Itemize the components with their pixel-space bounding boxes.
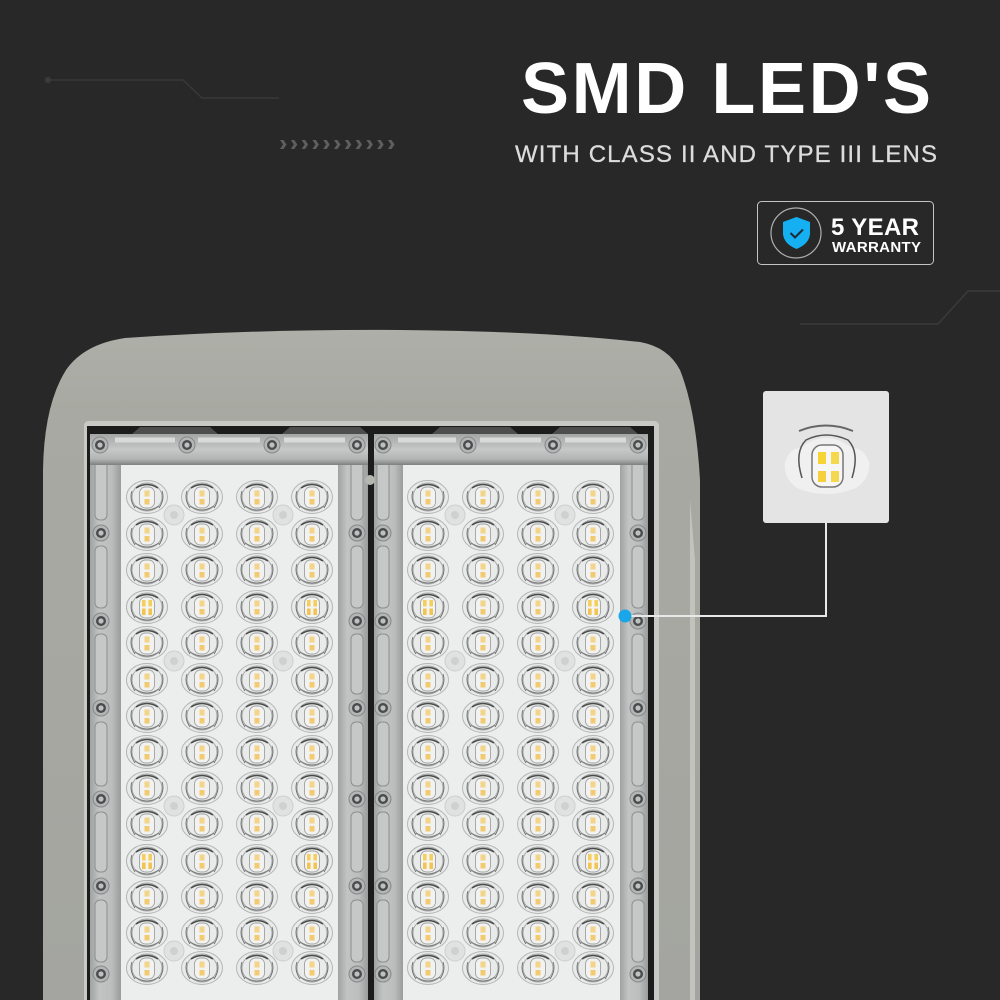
subtitle: WITH CLASS II AND TYPE III LENS	[515, 141, 937, 168]
sensors	[445, 505, 575, 961]
LED plate	[403, 465, 620, 1000]
decorative chevrons	[280, 140, 394, 149]
sensors	[164, 505, 293, 961]
centre clip	[365, 475, 375, 485]
right module	[374, 434, 648, 1000]
warranty years: 5 YEAR	[831, 214, 919, 241]
street light	[43, 330, 700, 1000]
decorative circuit line, top left	[46, 78, 279, 98]
title: SMD LED'S	[521, 49, 931, 129]
callout: LED close-up	[763, 391, 889, 523]
warranty label: WARRANTY	[832, 239, 921, 256]
callout marker	[618, 610, 632, 622]
LED lenses	[126, 480, 332, 984]
decorative circuit line, right	[800, 291, 1000, 324]
icon: shield	[771, 208, 821, 258]
left module	[90, 434, 368, 1000]
callout connector	[625, 522, 826, 616]
LED plate	[121, 465, 338, 1000]
LED lenses	[408, 480, 614, 984]
frame	[84, 421, 659, 1000]
housing	[43, 330, 700, 1000]
housing side highlight	[690, 500, 695, 1000]
warranty badge	[758, 202, 934, 264]
